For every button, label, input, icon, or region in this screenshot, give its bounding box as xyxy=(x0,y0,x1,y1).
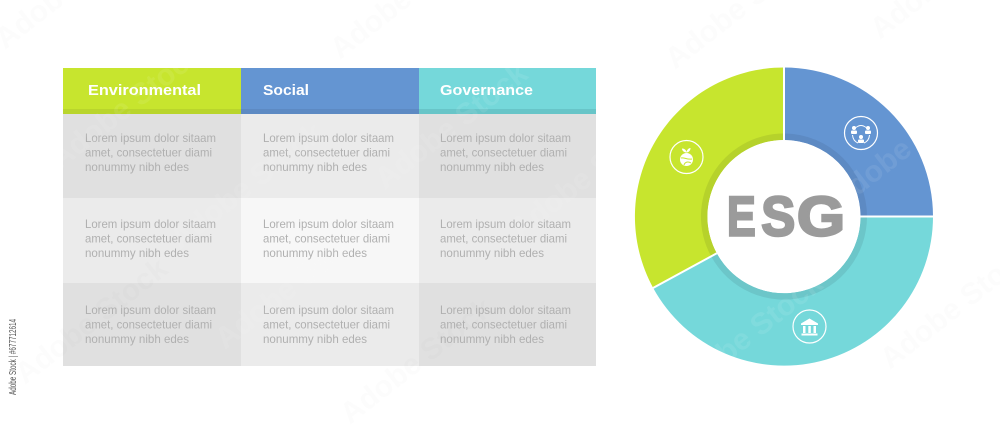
table row 1: nonummy nibh edes xyxy=(263,160,367,174)
center label: ESG: E xyxy=(727,184,756,248)
center circle xyxy=(708,140,860,293)
column header: Governance: Governance xyxy=(440,82,533,99)
column header: Social: Social xyxy=(263,82,309,99)
table row 1: amet, consectetuer diami xyxy=(440,146,567,160)
table row 2: amet, consectetuer diami xyxy=(440,232,567,246)
table row 1: Lorem ipsum dolor sitaam xyxy=(263,131,394,145)
table row 3: amet, consectetuer diami xyxy=(440,318,567,332)
table row 3: amet, consectetuer diami xyxy=(85,318,212,332)
icon: people network xyxy=(844,116,878,150)
table row 1 xyxy=(63,114,596,198)
watermarks: Adobe Stock xyxy=(9,251,174,391)
table row 2 xyxy=(63,198,596,283)
table row 2: Lorem ipsum dolor sitaam xyxy=(85,217,216,231)
icon: government building xyxy=(793,310,826,343)
watermarks: Adobe Stock xyxy=(369,56,534,196)
table row 3 xyxy=(63,283,596,366)
table row 2: amet, consectetuer diami xyxy=(85,232,212,246)
column header: Environmental: Environmental xyxy=(88,82,201,99)
table row 3: nonummy nibh edes xyxy=(263,332,367,346)
table row 2: Lorem ipsum dolor sitaam xyxy=(440,217,571,231)
table row 1: nonummy nibh edes xyxy=(85,160,189,174)
table row 1: Lorem ipsum dolor sitaam xyxy=(440,131,571,145)
stock image credit: Adobe Stock | #677712614 xyxy=(7,319,19,395)
column header: Social xyxy=(241,68,419,114)
table row 2: amet, consectetuer diami xyxy=(263,232,390,246)
table row 3: amet, consectetuer diami xyxy=(263,318,390,332)
segment separators xyxy=(653,67,934,288)
watermarks: Adobe Stock xyxy=(209,216,374,356)
watermarks: Adobe Stock xyxy=(824,76,989,216)
icon: plant globe xyxy=(670,140,703,174)
table row 2: nonummy nibh edes xyxy=(85,246,189,260)
table row 1: Lorem ipsum dolor sitaam xyxy=(85,131,216,145)
watermarks: Adobe Stock xyxy=(504,106,669,246)
segment: Social xyxy=(784,68,933,216)
table row 3: Lorem ipsum dolor sitaam xyxy=(440,303,571,317)
segment: Environmental xyxy=(635,67,784,288)
table row 3: Lorem ipsum dolor sitaam xyxy=(85,303,216,317)
table row 2: nonummy nibh edes xyxy=(263,246,367,260)
table row 2: Lorem ipsum dolor sitaam xyxy=(263,217,394,231)
watermarks: Adobe Stock xyxy=(334,291,499,430)
watermarks: Adobe Stock xyxy=(664,266,829,406)
table row 3: Lorem ipsum dolor sitaam xyxy=(263,303,394,317)
table row 1: amet, consectetuer diami xyxy=(85,146,212,160)
table row 1: amet, consectetuer diami xyxy=(263,146,390,160)
panel: ESG table xyxy=(63,68,596,366)
center label: ESG: G xyxy=(797,184,845,248)
column header: Environmental xyxy=(63,68,241,114)
table row 1: nonummy nibh edes xyxy=(440,160,544,174)
column header: Governance xyxy=(419,68,596,114)
table row 2: nonummy nibh edes xyxy=(440,246,544,260)
donut chart: ESG xyxy=(635,67,934,366)
segment: Governance xyxy=(653,216,933,366)
watermarks: Adobe Stock xyxy=(44,36,209,176)
watermarks: Adobe Stock xyxy=(164,116,329,256)
inner ring shadow xyxy=(701,133,867,300)
table row 3: nonummy nibh edes xyxy=(440,332,544,346)
table row 3: nonummy nibh edes xyxy=(85,332,189,346)
center label: ESG: S xyxy=(761,184,795,248)
